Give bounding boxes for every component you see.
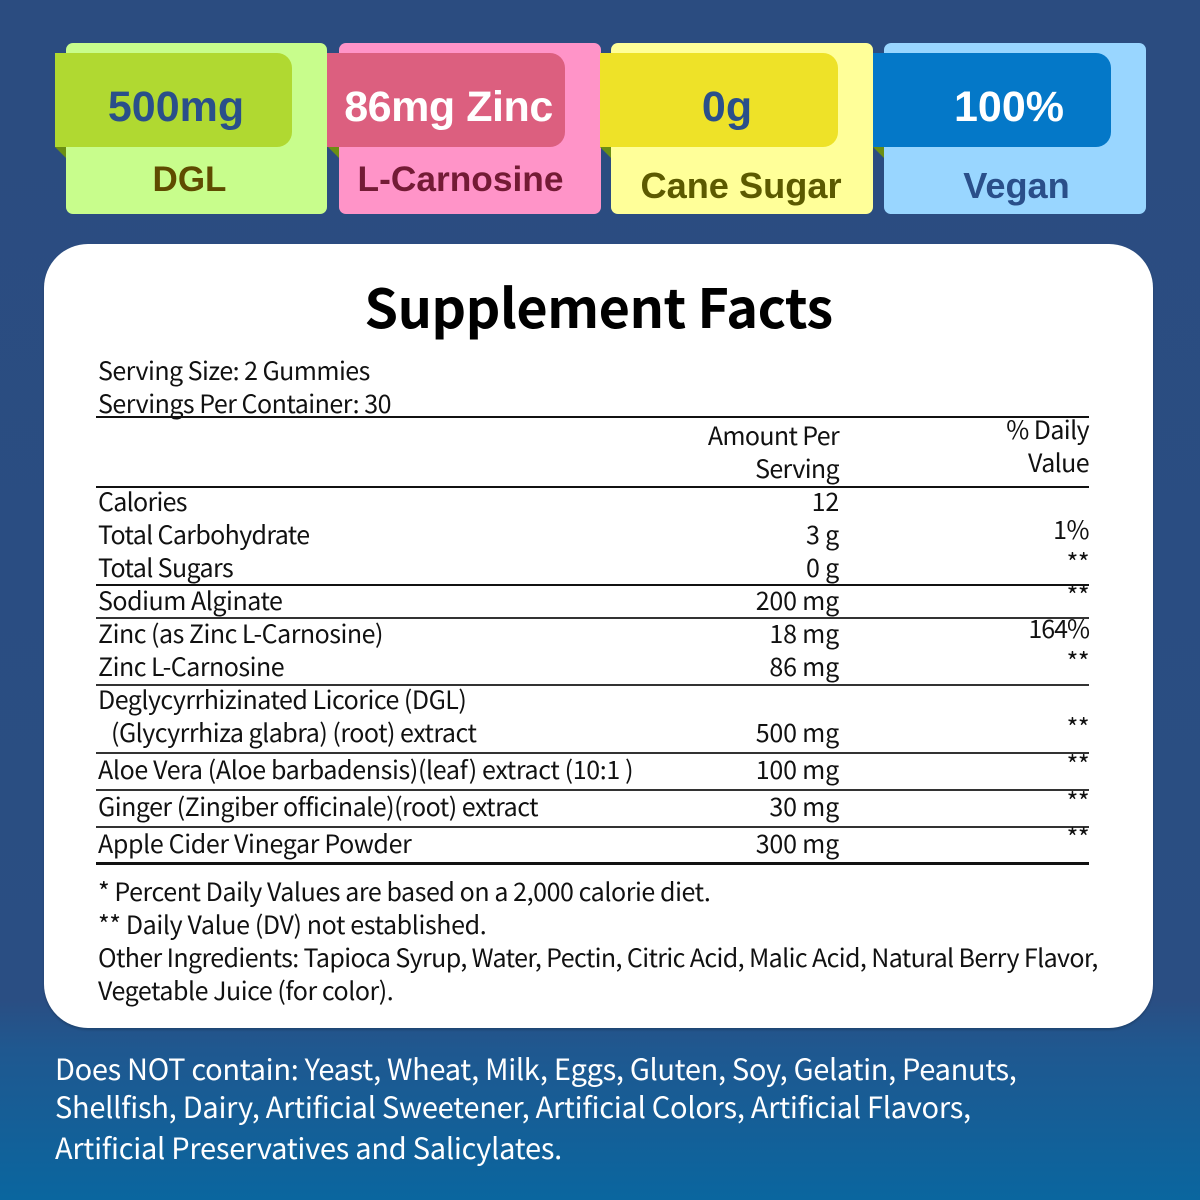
- row: calories: 12: [812, 483, 839, 519]
- ribbon: [55, 53, 292, 147]
- row: apple cider vinegar: 300 mg: [756, 825, 839, 861]
- panel: supplement facts: [44, 244, 1153, 1028]
- row: aloe vera: [98, 746, 1089, 787]
- stat card: 0g Cane Sugar: [600, 43, 873, 214]
- row: aloe vera: **: [1067, 746, 1089, 782]
- row: ginger: 30 mg: [769, 788, 839, 824]
- row: sodium alginate: [98, 577, 1089, 618]
- row: total sugars: Total Sugars: [98, 549, 233, 585]
- row: aloe vera: 100 mg: [756, 751, 839, 787]
- heading: Supplement Facts: [364, 265, 833, 344]
- card background: [66, 43, 327, 214]
- row: deglycyrrhizinated licorice: Deglycyrrhizinated Licorice (DGL): [98, 681, 466, 717]
- row: zinc: 18 mg: [769, 615, 839, 651]
- column header: amount: [708, 417, 840, 486]
- ribbon fold: [600, 147, 611, 158]
- row: deglycyrrhizinated licorice: **: [1067, 709, 1089, 745]
- row: zinc l-carnosine: 86 mg: [769, 648, 839, 684]
- row: zinc l-carnosine: Zinc L-Carnosine: [98, 648, 284, 684]
- footnotes: Vegetable Juice (for color).: [98, 972, 393, 1008]
- row: apple cider vinegar: [98, 819, 1089, 861]
- ribbon: [873, 53, 1111, 147]
- allergen statement: [55, 1047, 1017, 1168]
- row: total carbohydrate: 1%: [1053, 511, 1089, 547]
- column header: daily value: % Daily: [1006, 411, 1089, 447]
- stat card: 86mg Zinc L-Carnosine: [327, 43, 601, 214]
- row: ginger: [98, 783, 1089, 824]
- stat card: 500mg DGL: [55, 43, 327, 214]
- allergen statement: Does NOT contain: Yeast, Wheat, Milk, Eggs, Gluten, Soy, Gelatin, Peanuts,: [55, 1047, 1017, 1089]
- row: zinc l-carnosine: [98, 643, 1089, 684]
- servings per container: Servings Per Container: 30: [98, 385, 391, 421]
- column header: daily value: Value: [1028, 444, 1089, 480]
- row: total carbohydrate: Total Carbohydrate: [98, 516, 309, 552]
- column header: amount: Amount Per: [708, 417, 839, 453]
- footnotes: ** Daily Value (DV) not established.: [98, 906, 486, 942]
- row: sodium alginate: 200 mg: [756, 582, 839, 618]
- row: zinc: [98, 610, 1090, 651]
- card background: [339, 43, 601, 214]
- footnotes: Other Ingredients: Tapioca Syrup, Water, Pectin, Citric Acid, Malic Acid, Natural Berry Flavor,: [98, 939, 1098, 975]
- row: sodium alginate: Sodium Alginate: [98, 582, 282, 618]
- row: total carbohydrate: 3 g: [806, 516, 839, 552]
- ribbon: [600, 53, 838, 147]
- allergen statement: Shellfish, Dairy, Artificial Sweetener, Artificial Colors, Artificial Flavors,: [55, 1085, 971, 1127]
- ribbon fold: [55, 147, 66, 158]
- card background: [611, 43, 873, 214]
- row: deglycyrrhizinated licorice: [98, 681, 1089, 750]
- stat label: L-Carnosine: [358, 160, 563, 199]
- row: sodium alginate: **: [1067, 577, 1089, 613]
- card background: [884, 43, 1146, 214]
- row: ginger: **: [1067, 783, 1089, 819]
- stat label: Cane Sugar: [640, 165, 842, 206]
- row: apple cider vinegar: Apple Cider Vinegar Powder: [98, 825, 411, 861]
- row: deglycyrrhizinated licorice: (Glycyrrhiza glabra) (root) extract: [111, 714, 476, 750]
- row: calories: Calories: [98, 483, 187, 519]
- row: zinc: 164%: [1028, 610, 1089, 646]
- row: zinc: Zinc (as Zinc L-Carnosine): [98, 615, 383, 651]
- row: total sugars: [98, 544, 1089, 585]
- row: apple cider vinegar: **: [1067, 819, 1089, 855]
- column header: amount: Serving: [755, 450, 839, 486]
- row: aloe vera: Aloe Vera (Aloe barbadensis)(leaf) extract (10:1 ): [98, 751, 633, 787]
- stat label: Vegan: [963, 165, 1070, 206]
- row: total sugars: 0 g: [806, 549, 839, 585]
- stat value: 500mg: [108, 83, 244, 131]
- stat card: 100% Vegan: [873, 43, 1146, 214]
- stat value: 0g: [702, 83, 752, 131]
- ribbon fold: [328, 147, 339, 158]
- stat value: 86mg Zinc: [344, 83, 553, 131]
- row: zinc l-carnosine: **: [1067, 643, 1089, 679]
- allergen statement: Artificial Preservatives and Salicylates.: [55, 1126, 562, 1168]
- serving size: Serving Size: 2 Gummies: [98, 352, 370, 388]
- stat value: 100%: [954, 83, 1064, 131]
- row: deglycyrrhizinated licorice: 500 mg: [756, 714, 839, 750]
- row: ginger: Ginger (Zingiber officinale)(root) extract: [98, 788, 538, 824]
- ribbon: [327, 53, 565, 147]
- footnotes: * Percent Daily Values are based on a 2,000 calorie diet.: [98, 873, 710, 909]
- row: total carbohydrate: [98, 511, 1089, 552]
- row: total sugars: **: [1067, 544, 1089, 580]
- footnotes: [98, 873, 1098, 1008]
- ribbon fold: [873, 147, 884, 158]
- stat label: DGL: [153, 160, 226, 199]
- column header: daily value: [1006, 411, 1090, 480]
- row: calories: [98, 483, 839, 519]
